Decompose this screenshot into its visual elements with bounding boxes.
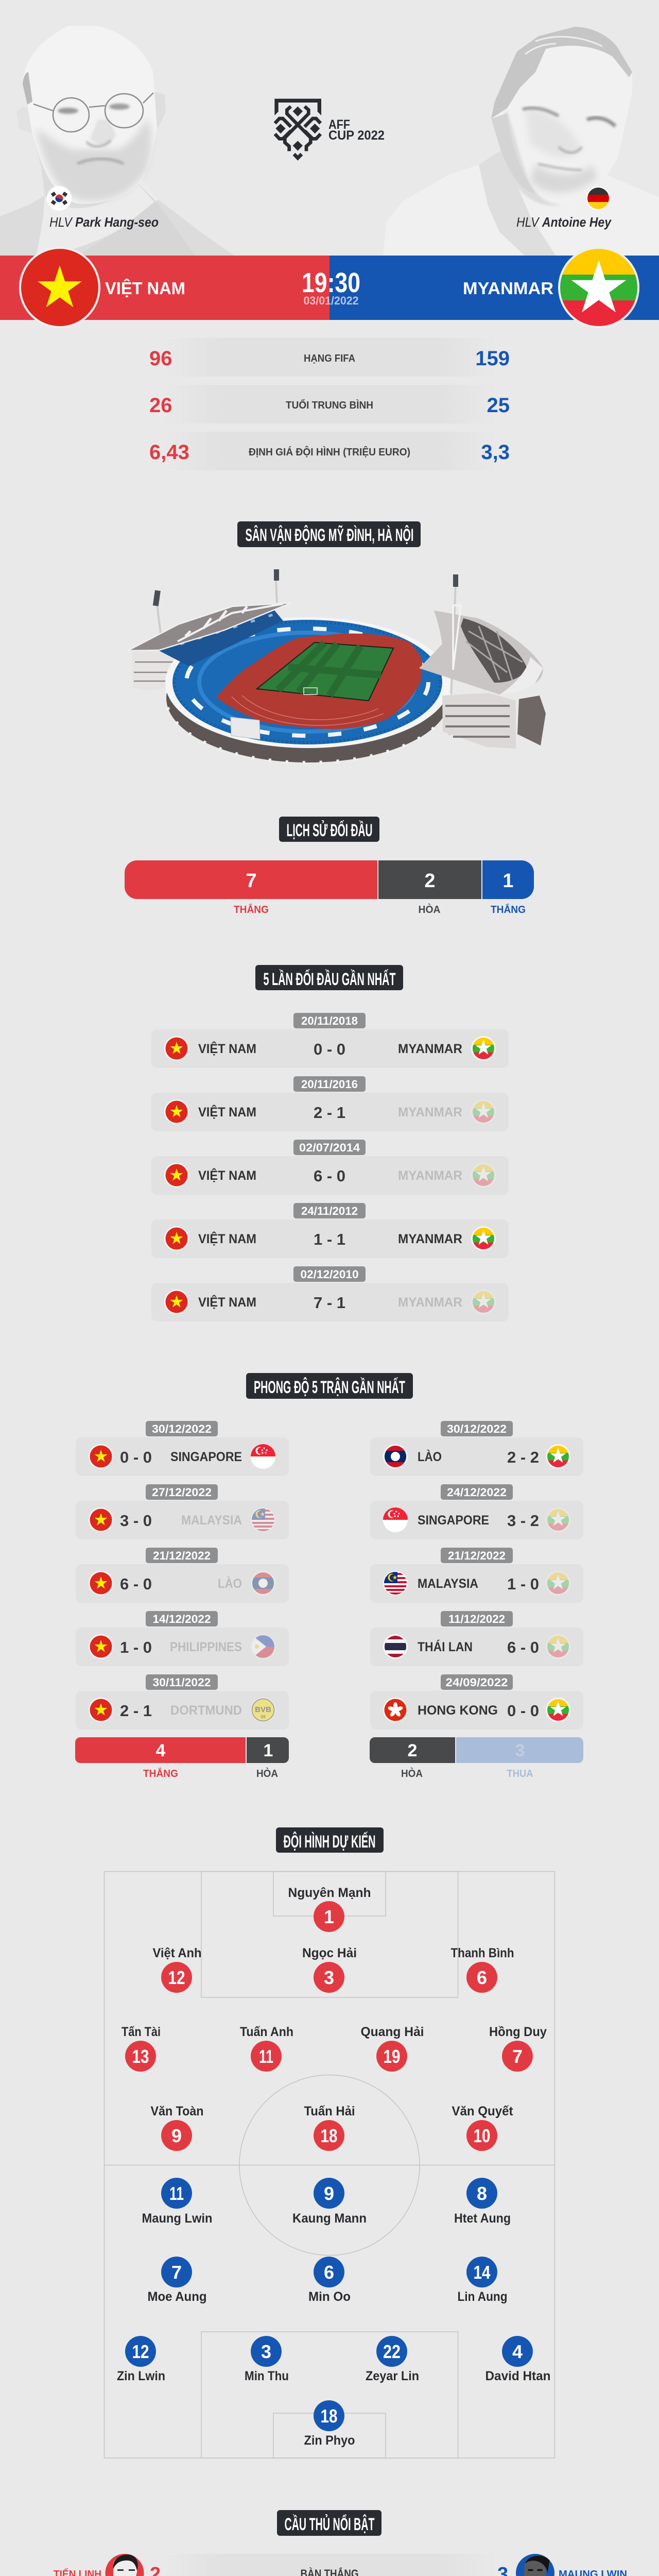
player: Zin Phyo [304,2400,355,2448]
stat: squad value: ĐỊNH GIÁ ĐỘI HÌNH (TRIỆU EURO) [249,446,410,458]
kick-off time: 19:30 [302,267,360,298]
player: Min Oo: 6 [324,2262,334,2283]
player: Việt Anh [152,1946,202,1993]
player: Zeyar Lin [366,2336,419,2383]
pole lattice [453,605,461,670]
player: Zeyar Lin: 22 [383,2341,401,2362]
match: Malaysia - Myanmar: 21/12/2022 [448,1549,506,1562]
match row: 20/11/2016: MYANMAR [398,1105,462,1120]
chart: Myanmar form summary bar: THUA [507,1768,533,1780]
match row: 02/12/2010: 02/12/2010 [301,1268,358,1281]
match: Vietnam - Malaysia: MALAYSIA [181,1513,242,1528]
player: Văn Toàn: 9 [171,2125,182,2146]
match: Thailand - Myanmar [370,1611,583,1666]
player: Văn Toàn [150,2104,204,2151]
player: Moe Aung [147,2257,207,2304]
player: David Htan [485,2336,551,2383]
chart: Myanmar form summary bar: 2 [408,1741,417,1760]
match: Vietnam - Philippines: 1 - 0 [120,1638,152,1656]
match: Malaysia - Myanmar: MALAYSIA [418,1577,478,1591]
coach label: Park Hang-seo [47,186,159,230]
player: Moe Aung: Moe Aung [147,2290,207,2304]
match: Vietnam - Singapore [76,1421,289,1476]
stat: squad value: 6,43 [149,441,189,464]
stat: FIFA ranking: 96 [149,347,172,370]
match: Malaysia - Myanmar [370,1548,583,1603]
segment: Myanmar wins [482,860,534,916]
match row: 20/11/2018 [151,1013,509,1068]
logo text [328,117,385,143]
player: Tấn Tài [122,2025,161,2072]
pitch markings [104,1871,555,2458]
player: Tuấn Hải: 18 [320,2125,338,2146]
match: Vietnam - Malaysia: 27/12/2022 [152,1486,212,1499]
match: Vietnam - Philippines: PHILIPPINES [170,1640,242,1654]
player: Htet Aung: Htet Aung [454,2211,511,2226]
player: Thanh Bình: Thanh Bình [451,1946,514,1960]
player: Min Oo: Min Oo [308,2290,351,2304]
match: Vietnam - Singapore: SINGAPORE [170,1450,242,1464]
player: Lin Aung [457,2257,508,2304]
match: Vietnam - Dortmund: 2 - 1 [120,1702,152,1720]
left roof stand seats [159,609,283,666]
player: Thanh Bình [451,1946,514,1993]
match: Vietnam - Singapore: 30/12/2022 [152,1422,212,1435]
match: Singapore - Myanmar: 24/12/2022 [447,1486,507,1499]
match: Thailand - Myanmar: 6 - 0 [507,1638,539,1656]
player: Zin Lwin: 12 [132,2341,149,2362]
logo text: AFF [328,117,350,132]
match row: 02/07/2014: 6 - 0 [314,1167,345,1185]
running track [216,634,422,729]
left roof [128,603,291,651]
football pitch [257,642,393,701]
chart: Myanmar form summary bar: 3 [515,1741,525,1760]
match: Vietnam - Laos: 6 - 0 [120,1575,152,1593]
logo: AFF Cup 2022 [274,99,385,161]
match row: 20/11/2016: 20/11/2016 [301,1078,358,1091]
match: Vietnam - Philippines [76,1611,289,1666]
match: Vietnam - Laos: LÀO [218,1576,242,1591]
player: Văn Quyết: 10 [474,2125,490,2146]
segment: Vietnam wins: THẮNG [234,903,269,916]
match: Vietnam - Dortmund: DORTMUND [170,1703,242,1718]
player: Moe Aung: 7 [171,2262,182,2283]
segment: draws [378,860,481,916]
chart: head-to-head stacked bar [125,860,534,916]
stat: FIFA ranking [149,338,510,377]
match row: 02/12/2010 [151,1266,509,1321]
player: Tiến Linh [54,2554,161,2576]
stat: FIFA ranking: HẠNG FIFA [304,353,355,364]
chart: Vietnam form summary bar: 4 [156,1741,166,1760]
heading: standout players [277,2510,381,2536]
match row: 24/11/2012: MYANMAR [398,1232,462,1246]
match band: Việt Nam vs Myanmar [0,247,659,331]
match row: 20/11/2016 [151,1076,509,1131]
player: Maung Lwin: 11 [169,2183,184,2204]
player: Nguyên Mạnh: Nguyên Mạnh [288,1886,371,1900]
match: Vietnam - Laos [76,1548,289,1603]
match row: 02/07/2014: 02/07/2014 [299,1141,360,1154]
player: Nguyên Mạnh [288,1886,371,1932]
stadium rim [165,617,450,748]
match: Singapore - Myanmar [370,1484,583,1539]
team: Myanmar players [117,2178,551,2448]
segment: Vietnam wins [125,860,377,916]
player: Quang Hải: 19 [383,2046,401,2067]
seating bowl [172,620,442,744]
team name: Myanmar: MYANMAR [463,279,553,298]
chart: Vietnam form summary bar [75,1737,289,1780]
logo mark [274,99,321,161]
illustration: Mỹ Đình stadium [128,569,546,762]
logo text: CUP 2022 [328,128,385,143]
player: Tuấn Hải: Tuấn Hải [304,2104,355,2119]
stat: squad value [149,432,510,470]
scoreboard block [231,717,260,739]
band right [330,256,659,320]
coach name: HLV Antoine Hey [516,214,612,230]
match row: 02/12/2010: VIỆT NAM [198,1294,256,1310]
player: Ngọc Hải [302,1946,357,1993]
match: Singapore - Myanmar: 3 - 2 [507,1512,539,1530]
stat: average age: 25 [487,394,510,417]
chart: Myanmar form summary bar: HÒA [401,1767,423,1780]
stadium wall [166,634,449,762]
match row: 24/11/2012: 24/11/2012 [301,1205,358,1217]
player: Min Thu [245,2336,289,2383]
player: Lin Aung: Lin Aung [457,2290,508,2304]
match row: 20/11/2016: VIỆT NAM [198,1104,256,1120]
player: Min Thu: Min Thu [245,2369,289,2383]
player: Nguyên Mạnh: 1 [324,1906,334,1927]
chart: Vietnam form summary bar: THẮNG [143,1767,178,1780]
panel: Vietnam form [76,1421,289,1730]
heading: form in last five matches [246,1373,413,1399]
match row: 02/12/2010: MYANMAR [398,1295,462,1310]
match: Vietnam - Malaysia [76,1484,289,1539]
match: Singapore - Myanmar: SINGAPORE [418,1513,489,1528]
stat: squad value: 3,3 [481,441,510,464]
flag: Myanmar [558,249,639,326]
match: Malaysia - Myanmar: 1 - 0 [507,1575,539,1593]
chart: Myanmar form summary bar [370,1737,583,1780]
match date: 03/01/2022 [304,294,358,307]
match: Vietnam - Philippines: 14/12/2022 [152,1613,211,1625]
heading: expected lineups: ĐỘI HÌNH DỰ KIẾN [283,1832,376,1852]
match row: 02/12/2010: 7 - 1 [314,1294,345,1312]
player: Tấn Tài: Tấn Tài [122,2025,161,2039]
match: Hong Kong - Myanmar: 24/09/2022 [446,1676,508,1689]
diagram: football pitch lineup [104,1871,555,2458]
player: Maung Lwin [497,2554,627,2576]
match: Laos - Myanmar: 2 - 2 [507,1448,539,1466]
match row: 20/11/2018: VIỆT NAM [198,1041,256,1056]
match: Hong Kong - Myanmar: 0 - 0 [507,1702,539,1720]
player: Ngọc Hải: Ngọc Hải [302,1946,357,1960]
player: David Htan: 4 [512,2341,523,2362]
coach name: HLV Park Hang-seo [49,214,159,230]
segment: draws: 2 [424,870,436,892]
match row: 24/11/2012: VIỆT NAM [198,1231,256,1246]
match row: 20/11/2018: 0 - 0 [314,1040,345,1058]
match row: 20/11/2018: MYANMAR [398,1042,462,1056]
player: David Htan: David Htan [485,2369,551,2383]
illustration: coach Park Hang-seo portrait [0,26,235,256]
match row: 02/07/2014: MYANMAR [398,1168,462,1183]
heading: stadium: SÂN VẬN ĐỘNG MỸ ĐÌNH, HÀ NỘI [245,525,414,545]
player: Zin Lwin: Zin Lwin [117,2369,165,2383]
stat row: goals [54,2554,627,2576]
match: Vietnam - Dortmund: 30/11/2022 [152,1676,211,1689]
player: Văn Toàn: Văn Toàn [150,2104,204,2119]
player: Htet Aung: 8 [477,2183,487,2204]
player: Hồng Duy [489,2025,547,2072]
left stand structure [132,651,186,690]
player: Quang Hải: Quang Hải [360,2025,424,2039]
chart: Vietnam form summary bar: 1 [264,1741,273,1760]
player: Kaung Mann: 9 [324,2183,334,2204]
illustration: coach Antoine Hey portrait [383,27,659,256]
match: Laos - Myanmar: 30/12/2022 [447,1422,507,1435]
light poles [157,580,456,735]
player: Tuấn Hải [304,2104,355,2151]
match: Thailand - Myanmar: 11/12/2022 [448,1613,505,1625]
panel: Myanmar form [370,1421,583,1730]
right building [442,693,516,749]
player: Lin Aung: 14 [474,2262,490,2283]
player: Zin Phyo: 18 [320,2405,338,2427]
player: Zin Phyo: Zin Phyo [304,2433,355,2448]
player: Việt Anh: 12 [168,1967,185,1988]
player: Kaung Mann: Kaung Mann [292,2211,367,2226]
band left [0,256,330,320]
heading: expected lineups [276,1827,384,1853]
player: Tuấn Anh: 11 [259,2046,273,2067]
match row: 24/11/2012 [151,1203,509,1258]
stats table [149,338,510,470]
player: Min Oo [308,2257,351,2304]
match row: 02/07/2014 [151,1140,509,1195]
player: Kaung Mann [292,2178,367,2226]
segment: Myanmar wins: 1 [502,870,514,892]
flag: Vietnam [19,247,100,328]
stat: average age: TUỔI TRUNG BÌNH [286,399,373,411]
match: Vietnam - Malaysia: 3 - 0 [120,1512,152,1530]
match: Thailand - Myanmar: THÁI LAN [418,1639,473,1654]
player: Tuấn Anh [240,2025,293,2072]
flag: South Korea [47,186,72,211]
match: Vietnam - Singapore: 0 - 0 [120,1448,152,1466]
player: Văn Quyết [452,2104,513,2151]
player: Thanh Bình: 6 [477,1967,487,1988]
player: Maung Lwin [142,2178,212,2226]
player: Hồng Duy: Hồng Duy [489,2025,547,2039]
player: Zin Lwin [117,2336,165,2383]
match: Laos - Myanmar: LÀO [418,1449,442,1464]
right crescent roof [419,611,543,694]
heading: last five meetings: 5 LẦN ĐỐI ĐẦU GẦN NHẤT [264,969,396,989]
player: Ngọc Hải: 3 [324,1967,334,1988]
stat: FIFA ranking: 159 [475,347,510,370]
player: Maung Lwin: Maung Lwin [142,2211,212,2226]
match: Vietnam - Laos: 21/12/2022 [153,1549,211,1562]
player: Việt Anh: Việt Anh [152,1946,202,1960]
coach label: Antoine Hey [516,187,612,230]
team: Vietnam players [122,1886,547,2151]
stat: average age [149,385,510,423]
stat: average age: 26 [149,394,172,417]
heading: head-to-head history: LỊCH SỬ ĐỐI ĐẦU [286,820,373,840]
match: Hong Kong - Myanmar: HONG KONG [418,1703,498,1718]
player: Htet Aung [454,2178,511,2226]
match row: 02/07/2014: VIỆT NAM [198,1167,256,1183]
heading: form in last five matches: PHONG ĐỘ 5 TRẬN GẦN NHẤT [254,1377,405,1397]
match row: 20/11/2018: 20/11/2018 [301,1014,358,1027]
player: Tấn Tài: 13 [132,2046,149,2067]
match: Hong Kong - Myanmar [370,1674,583,1730]
heading: standout players: CẦU THỦ NỔI BẬT [284,2515,375,2534]
player: Văn Quyết: Văn Quyết [452,2104,513,2119]
segment: draws: HÒA [418,903,441,916]
match: Vietnam - Dortmund [76,1674,289,1730]
team name: Việt Nam: VIỆT NAM [105,279,185,298]
heading: last five meetings [255,965,403,990]
chart: Vietnam form summary bar: HÒA [256,1767,278,1780]
match row: 24/11/2012: 1 - 1 [314,1230,345,1248]
player: Quang Hải [360,2025,424,2072]
flag: Germany [586,187,610,210]
heading: head-to-head history [279,817,379,842]
match: Laos - Myanmar [370,1421,583,1476]
player: Tuấn Anh: Tuấn Anh [240,2025,293,2039]
player: Hồng Duy: 7 [512,2046,523,2067]
segment: Myanmar wins: THẮNG [491,903,526,916]
player: Zeyar Lin: Zeyar Lin [366,2369,419,2383]
segment: Vietnam wins: 7 [246,870,257,892]
heading: stadium [237,521,421,547]
match row: 20/11/2016: 2 - 1 [314,1104,345,1122]
player: Min Thu: 3 [261,2341,271,2362]
